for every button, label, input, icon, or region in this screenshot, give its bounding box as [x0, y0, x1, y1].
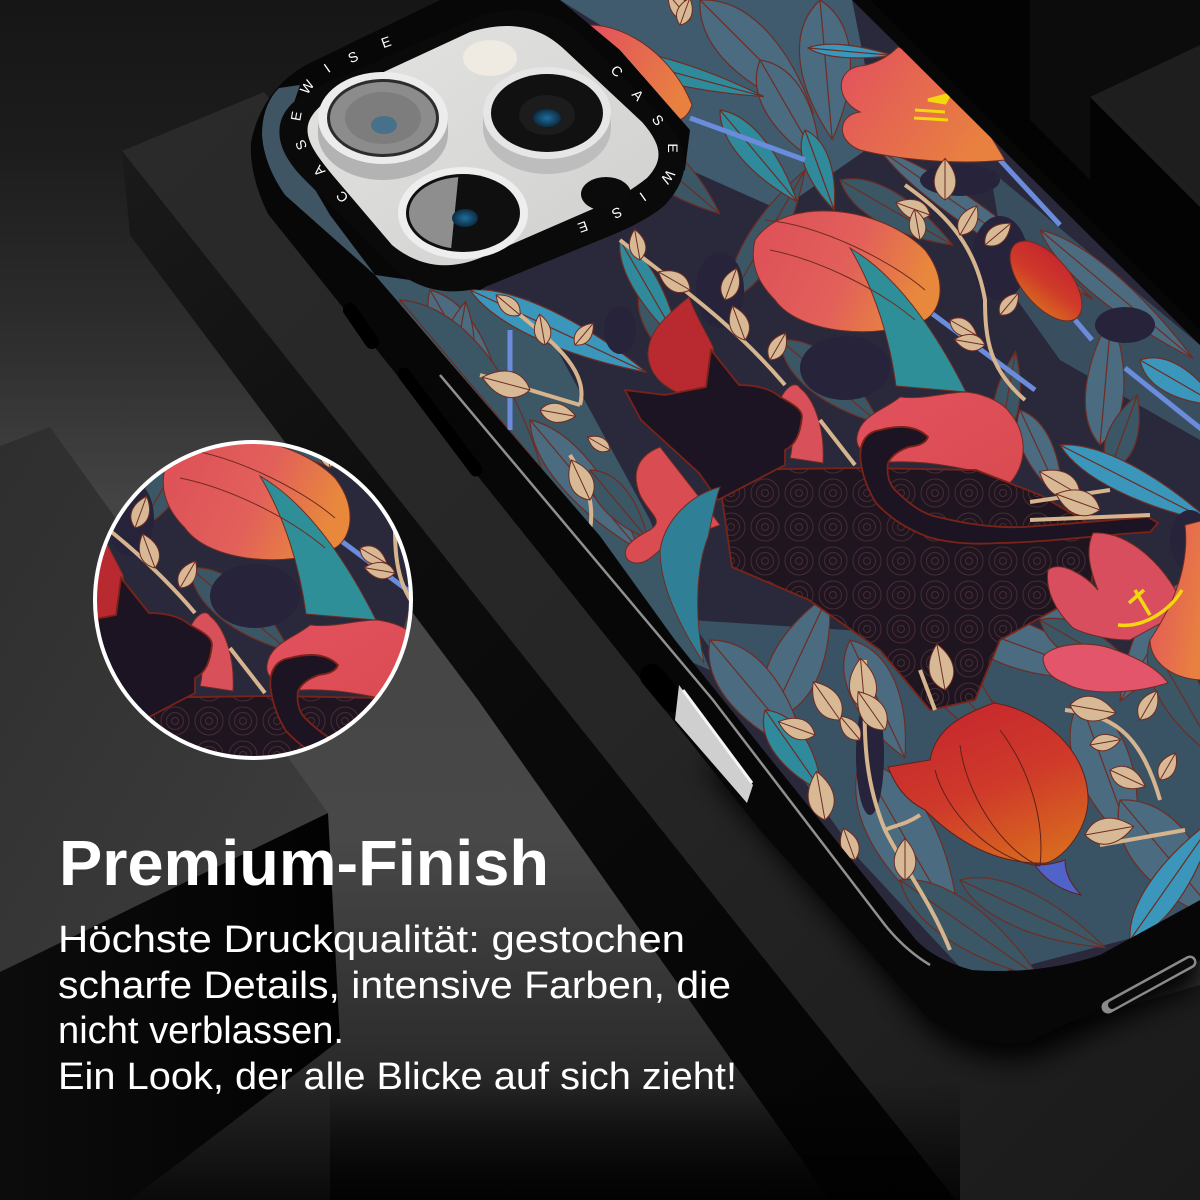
camera module	[279, 10, 685, 291]
peony: coral	[857, 392, 1023, 483]
brand lettering: C	[333, 188, 351, 206]
cat	[625, 350, 1158, 710]
art sliver beside camera	[262, 85, 375, 275]
brand lettering: E	[576, 218, 590, 236]
brand lettering	[287, 33, 681, 236]
body text: Höchste Druckqualität: gestochen	[58, 919, 685, 961]
brand lettering: A	[309, 162, 328, 180]
side buttons and ports	[350, 310, 1190, 1007]
title: Premium-Finish	[59, 827, 549, 899]
lens: ultrawide	[398, 167, 528, 259]
brand lettering: S	[649, 112, 667, 128]
flower: top coral	[841, 47, 1005, 162]
camera plate	[308, 26, 658, 265]
brand lettering: I	[321, 60, 333, 76]
button: volume slot	[404, 374, 476, 470]
phone case body	[251, 0, 1200, 1059]
camera ring	[279, 10, 685, 291]
brand lettering: S	[609, 204, 625, 222]
blue stems	[510, 118, 1200, 432]
brand lettering: E	[379, 33, 393, 51]
flower: large coral right	[1043, 520, 1200, 692]
panel: case artwork	[375, 0, 1200, 971]
petal: red behind cat	[648, 297, 714, 398]
brand lettering: S	[345, 48, 361, 66]
flash	[463, 40, 517, 76]
flower: coral left of body	[625, 447, 720, 563]
bud: small red	[1010, 240, 1082, 322]
brand lettering: W	[297, 76, 318, 97]
tulip: small top orange	[590, 25, 692, 120]
button: camera control port	[652, 676, 672, 700]
brand lettering: I	[637, 189, 649, 205]
dark gaps between leaves	[604, 164, 1200, 815]
body text: Ein Look, der alle Blicke auf sich zieht!	[58, 1056, 737, 1098]
foliage underlay	[370, 0, 1200, 980]
leaf: teal front	[660, 487, 720, 663]
sprigs: golden branches	[479, 0, 1185, 950]
leaves: blue-grey foliage	[376, 0, 1200, 995]
brand lettering: E	[665, 143, 681, 153]
body text: scharfe Details, intensive Farben, die	[58, 965, 731, 1007]
tulip: large coral	[753, 211, 966, 392]
button: action port	[350, 310, 372, 342]
glossy bezel highlight	[440, 375, 930, 965]
brand lettering: C	[608, 62, 626, 80]
body text: nicht verblassen.	[58, 1010, 344, 1052]
tulip: bottom red	[888, 703, 1088, 895]
brand lettering: W	[657, 167, 678, 188]
port: USB-C	[1108, 962, 1190, 1007]
inset: zoomed print detail	[93, 440, 413, 760]
lidar sensor	[581, 177, 631, 211]
lens: telephoto	[483, 67, 611, 174]
brand lettering: S	[292, 137, 310, 153]
button: silver side key	[675, 685, 753, 803]
brand lettering: A	[629, 86, 648, 104]
brand lettering: E	[287, 110, 305, 122]
petal: coral beside cat	[780, 385, 823, 463]
body text	[58, 919, 737, 1098]
lens: main	[318, 72, 448, 180]
